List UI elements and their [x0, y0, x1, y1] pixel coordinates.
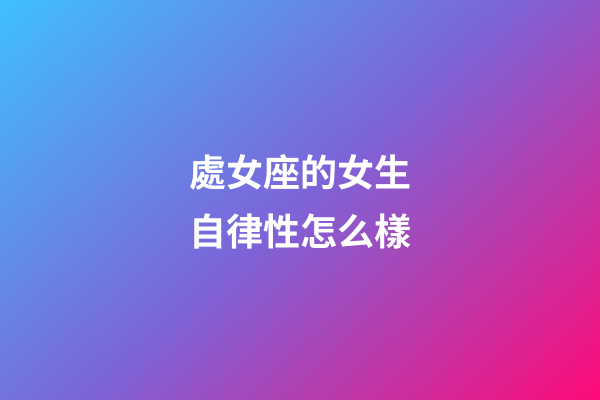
title [189, 153, 411, 253]
title line 1: 處女座的女生 [189, 153, 411, 194]
title line 2: 自律性怎么樣 [189, 212, 411, 253]
